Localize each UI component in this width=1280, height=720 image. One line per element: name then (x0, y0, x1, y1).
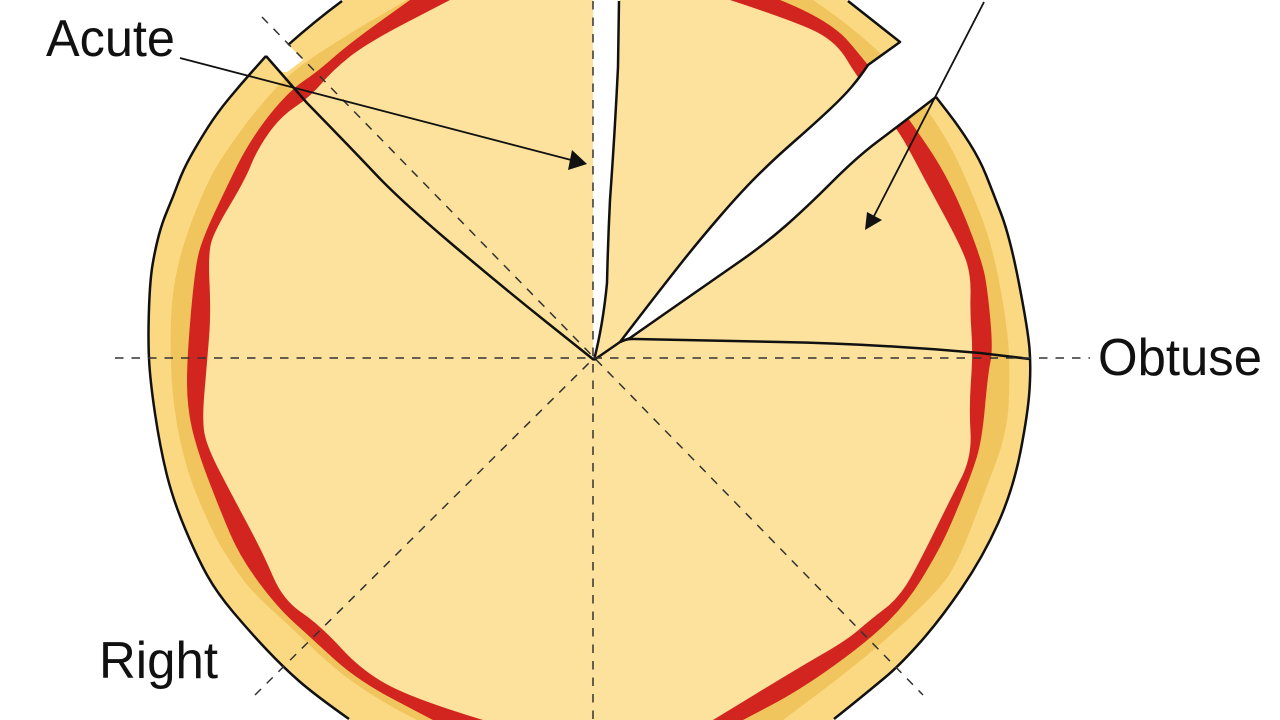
outline: obtuse slice lower edge (620, 339, 1030, 359)
label: Obtuse: Obtuse (1098, 329, 1262, 387)
outline: top crust left (288, 1, 342, 45)
outline: pizza edge right (834, 97, 1030, 719)
arrow: obtuse slice (865, 2, 984, 230)
outline: pizza edge left and bottom (148, 56, 349, 719)
crust: dark inner band (171, 0, 1009, 720)
pizza (148, 0, 1030, 720)
sauce ring (187, 0, 992, 720)
outline: acute slice right edge (594, 1, 619, 360)
crust: light outer (148, 0, 1030, 720)
cheese (203, 0, 972, 720)
outline: knife lower edge (620, 97, 936, 342)
outline: left slice edge (266, 56, 594, 360)
label: Acute: Acute (46, 10, 175, 68)
gap: notch at upper left (266, 44, 303, 72)
label: Right: Right (99, 632, 219, 690)
gap: wide knife-shaped cut (620, 0, 1000, 342)
arrow: acute label (180, 58, 587, 170)
dashed guide lines (115, 1, 1090, 719)
outline: top slice tip and knife upper edge (594, 1, 900, 360)
gap: narrow acute sliver (593, 0, 619, 360)
